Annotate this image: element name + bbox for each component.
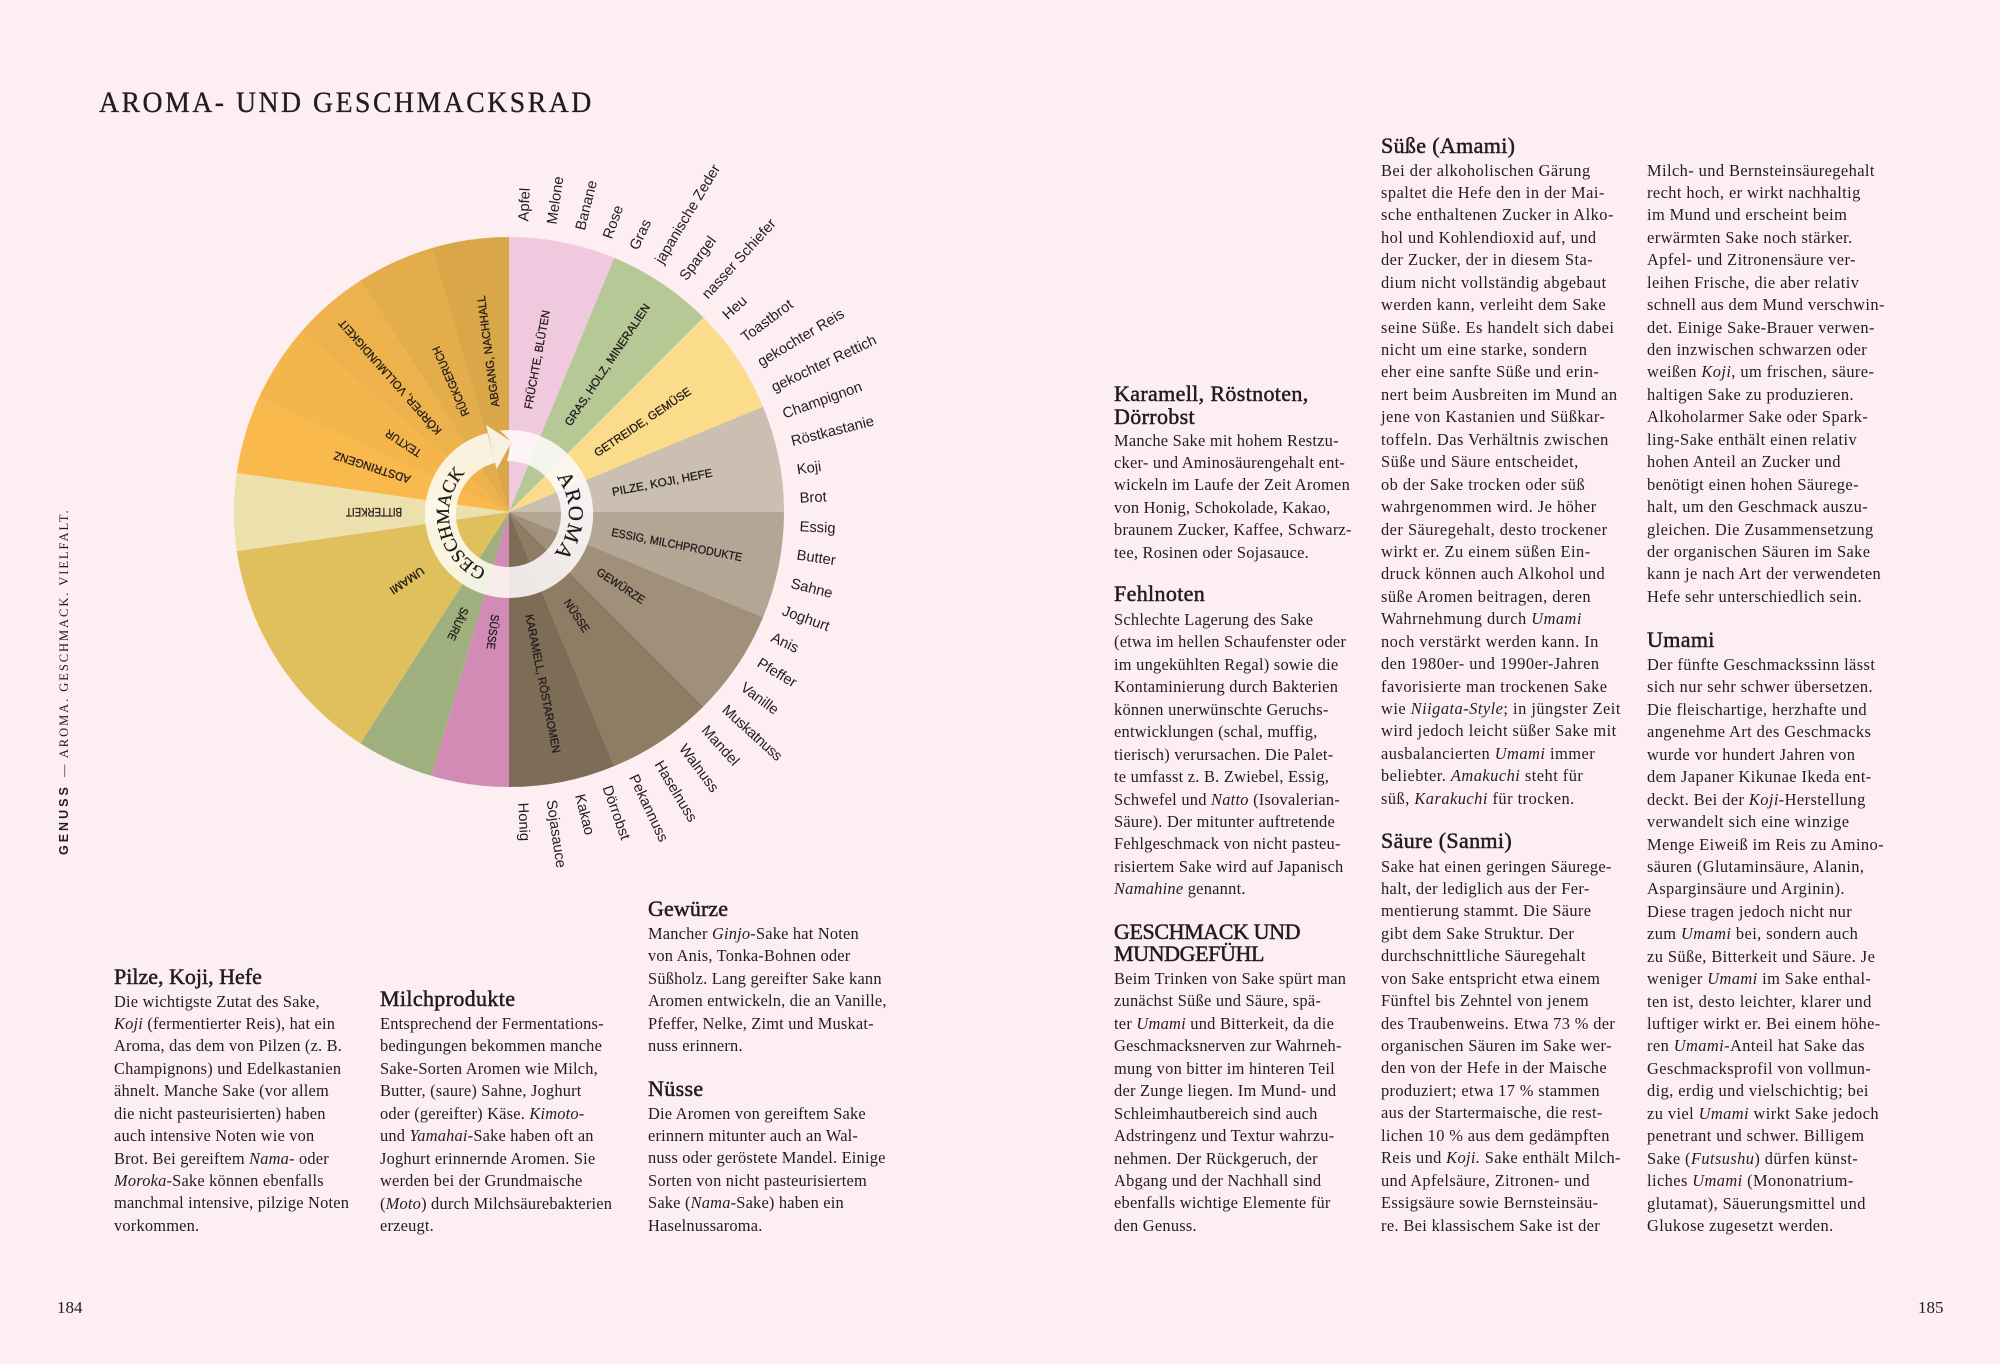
body: Sorten von nicht pasteurisiertem [648,1171,867,1190]
body: entwicklungen (schal, muffig, [1114,722,1318,741]
body: manchmal intensive, pilzige Noten [114,1193,349,1212]
outer aroma labels: nasser Schiefer [699,216,780,302]
outer aroma labels: Honig [514,802,532,841]
outer aroma labels: Sojasauce [543,799,568,869]
outer aroma labels: Champignon [781,379,864,422]
body: Sake-Sorten Aromen wie Milch, [380,1059,598,1078]
heading: Süße (Amami) [1381,133,1515,158]
body: säuren (Glutaminsäure, Alanin, [1647,857,1864,876]
text block: Säure continued: kann je nach Art der verwendeten [1647,564,1881,583]
body: der Säuregehalt, desto trockener [1381,520,1608,538]
text block: Pilze, Koji, Hefe [114,964,349,1235]
body: Sake hat einen geringen Säurege- [1381,856,1612,876]
body: nicht um eine starke, sondern [1381,340,1587,359]
body: produziert; etwa 17 % stammen [1381,1081,1600,1100]
body: verwandelt sich eine winzige [1647,812,1849,831]
body: werden bei der Grundmaische [380,1171,582,1190]
segment labels: SÄURE [444,605,470,642]
body: hol und Kohlendioxid auf, und [1381,228,1597,247]
body: wickeln im Laufe der Zeit Aromen [1114,475,1350,494]
body: den von der Hefe in der Maische [1381,1058,1607,1077]
segment labels: ADSTRINGENZ [332,448,412,485]
body: Champignons) und Edelkastanien [114,1059,341,1078]
body: Sake (Futsushu) dürfen künst- [1647,1149,1858,1168]
segment labels: FRÜCHTE, BLÜTEN [523,309,553,410]
body: nuss oder geröstete Mandel. Einige [648,1148,886,1167]
outer aroma labels: Butter [796,548,837,569]
body: sche enthaltenen Zucker in Alko- [1381,205,1614,224]
spine text: — AROMA. GESCHMACK. VIELFALT. [57,508,71,778]
page number 184: 184 [57,1298,82,1317]
body: Menge Eiweiß im Reis zu Amino- [1647,834,1884,854]
body: Aroma, das dem von Pilzen (z. B. [114,1036,342,1055]
heading: Umami [1647,627,1715,652]
body: (Moto) durch Milchsäurebakterien [380,1194,612,1212]
outer aroma labels: Brot [799,489,827,507]
text block: Säure (Sanmi) [1381,828,1621,1234]
body: wahrgenommen wird. Je höher [1381,497,1597,516]
body: Koji (fermentierter Reis), hat ein [114,1014,335,1033]
body: Entsprechend der Fermentations- [380,1014,604,1033]
outer aroma labels: Kakao [571,793,597,837]
body: Pfeffer, Nelke, Zimt und Muskat- [648,1014,874,1033]
body: weniger Umami im Sake enthal- [1647,969,1871,988]
segment labels: ABGANG, NACHHALL [476,294,502,408]
segment labels: NÜSSE [561,598,591,635]
body: Schlechte Lagerung des Sake [1114,610,1313,629]
body [380,1014,612,1235]
centre ring: taste arc with arrow: GESCHMACK [436,466,484,579]
body: deckt. Bei der Koji-Herstellung [1647,790,1866,809]
body: toffeln. Das Verhältnis zwischen [1381,430,1609,449]
text block: Säure continued: den inzwischen schwarzen oder [1647,340,1867,359]
body: auch intensive Noten wie von [114,1126,314,1145]
body: oder (gereifter) Käse. Kimoto- [380,1104,584,1123]
text block: Säure continued: recht hoch, er wirkt nachhaltig [1647,183,1861,202]
body: ter Umami und Bitterkeit, da die [1114,1014,1334,1033]
text block: Süße (Amami) [1380,133,1621,808]
outer aroma labels: Mandel [698,723,742,769]
body: Die wichtigste Zutat des Sake, [114,992,320,1010]
body: ob der Sake trocken oder süß [1381,475,1585,494]
body: den 1980er- und 1990er-Jahren [1381,654,1600,673]
body: Der fünfte Geschmackssinn lässt [1647,655,1875,674]
body: und Yamahai-Sake haben oft an [380,1126,594,1145]
heading: Milchprodukte [380,986,515,1011]
heading: Dörrobst [1114,404,1195,429]
body: halt, der lediglich aus der Fer- [1381,879,1590,898]
segment labels: RÜCKGERUCH [431,344,472,418]
body: glutamat), Säuerungsmittel und [1647,1194,1866,1212]
body: jene von Kastanien und Süßkar- [1381,407,1605,426]
body: Aromen entwickeln, die an Vanille, [648,991,887,1010]
body: dig, erdig und vielschichtig; bei [1647,1081,1869,1100]
body: Säure). Der mitunter auftretende [1114,812,1335,831]
body: penetrant und schwer. Billigem [1647,1126,1864,1145]
body: zu viel Umami wirkt Sake jedoch [1647,1104,1879,1123]
body: nehmen. Der Rückgeruch, der [1114,1148,1318,1168]
body: ten ist, desto leichter, klarer und [1647,992,1872,1011]
body: liches Umami (Mononatrium- [1647,1171,1854,1190]
heading: Pilze, Koji, Hefe [114,964,262,989]
text block: Säure continued: ling-Sake enthält einen relativ [1647,430,1857,449]
segment labels: TEXTUR [384,427,424,458]
body: lichen 10 % aus dem gedämpften [1381,1126,1610,1145]
body: sich nur sehr schwer übersetzen. [1647,677,1873,696]
body: Diese tragen jedoch nicht nur [1647,902,1852,921]
wheel wedges: aroma half [509,237,784,787]
body: dium nicht vollständig abgebaut [1381,273,1607,292]
body: erzeugt. [380,1216,434,1235]
body: Moroka-Sake können ebenfalls [114,1171,324,1190]
text block: Säure continued: der organischen Säuren im Sake [1647,542,1870,561]
text block: Geschmack und Mundgefühl [1114,919,1346,1235]
body [1114,610,1346,898]
body: des Traubenweins. Etwa 73 % der [1381,1014,1615,1033]
outer aroma labels: Rose [601,203,627,241]
body: te umfasst z. B. Zwiebel, Essig, [1114,767,1329,786]
outer aroma labels: Röstkastanie [790,414,876,450]
body: können unerwünschte Geruchs- [1114,700,1329,719]
segment labels: BITTERKEIT [346,505,402,517]
text block: Gewürze [648,896,887,1055]
body: Süßholz. Lang gereifter Sake kann [648,969,882,988]
body: Manche Sake mit hohem Restzu- [1114,430,1339,450]
body: angenehme Art des Geschmacks [1647,722,1871,741]
body: Fünftel bis Zehntel von jenem [1381,991,1589,1010]
text block: Säure continued: Milch- und Bernsteinsäuregehalt [1647,160,1875,180]
outer aroma labels: Gras [627,217,655,253]
outer aroma labels: Apfel [516,188,534,222]
body: Joghurt erinnernde Aromen. Sie [380,1149,595,1168]
body: wie Niigata-Style; in jüngster Zeit [1381,699,1621,718]
body: Wahrnehmung durch Umami [1381,609,1582,628]
text block: Säure continued: Hefe sehr unterschiedlich sein. [1647,587,1862,606]
segment labels: GRAS, HOLZ, MINERALIEN [563,302,653,429]
body: Fehlgeschmack von nicht pasteu- [1114,834,1341,853]
outer aroma labels: Melone [545,175,567,225]
outer aroma labels: Toastbrot [738,297,796,346]
body: eher eine sanfte Süße und erin- [1381,362,1599,381]
text block: Säure continued: haltigen Sake zu produzieren. [1647,385,1854,404]
text block: Säure continued: halt, um den Geschmack auszu- [1647,497,1868,516]
body: Schwefel und Natto (Isovalerian- [1114,790,1340,808]
segment labels: GETREIDE, GEMÜSE [592,386,694,460]
body: zunächst Süße und Säure, spä- [1114,991,1321,1010]
body: ebenfalls wichtige Elemente für [1114,1193,1331,1212]
body: Kontaminierung durch Bakterien [1114,677,1338,696]
segment labels [332,294,743,754]
centre ring: aroma arc: AROMA [554,475,583,556]
body: seine Süße. Es handelt sich dabei [1381,318,1614,337]
outer aroma labels: Walnuss [675,741,721,796]
body: ausbalancierten Umami immer [1381,744,1595,763]
body: beliebter. Amakuchi steht für [1381,766,1583,785]
body: Mancher Ginjo-Sake hat Noten [648,924,859,943]
heading: Fehlnoten [1114,581,1205,606]
body: dem Japaner Kikunae Ikeda ent- [1647,767,1872,786]
heading: Gewürze [648,896,728,921]
body: von Honig, Schokolade, Kakao, [1114,498,1331,517]
centre ring: aroma arc [500,430,594,598]
outer aroma labels [514,162,879,869]
body: Brot. Bei gereiftem Nama- oder [114,1149,329,1168]
outer aroma labels: gekochter Rettich [769,332,879,396]
heading: Säure (Sanmi) [1381,828,1512,853]
text block: Säure continued: im Mund und erscheint beim [1647,205,1847,224]
body [1114,430,1352,562]
outer aroma labels: Heu [720,293,751,323]
text block: Säure continued: weißen Koji, um frischen, säure- [1647,362,1874,381]
outer aroma labels: Vanille [737,680,781,718]
text block: Säure continued: erwärmten Sake noch stärker. [1647,228,1853,247]
body: durchschnittliche Säuregehalt [1381,946,1586,965]
body: spaltet die Hefe den in der Mai- [1381,183,1605,202]
body: Süße und Säure entscheidet, [1381,452,1579,471]
text block: Säure continued: hohen Anteil an Zucker und [1647,452,1841,471]
text block: Nüsse [648,1076,886,1235]
body: druck können auch Alkohol und [1381,564,1605,583]
body: wirkt er. Zu einem süßen Ein- [1381,542,1591,561]
body: mentierung stammt. Die Säure [1381,901,1591,920]
body: Bei der alkoholischen Gärung [1381,160,1591,180]
body: luftiger wirkt er. Bei einem höhe- [1647,1014,1881,1033]
text block: Säure continued: gleichen. Die Zusammensetzung [1647,520,1874,538]
body: Die Aromen von gereiftem Sake [648,1104,866,1122]
body: zu Süße, Bitterkeit und Säure. Je [1647,947,1875,966]
body: wird jedoch leicht süßer Sake mit [1381,721,1617,740]
body: Adstringenz und Textur wahrzu- [1114,1126,1334,1145]
body [1380,160,1621,808]
body: Asparginsäure und Arginin). [1647,879,1845,898]
text block: Säure continued: schnell aus dem Mund verschwin- [1647,295,1885,314]
body: Geschmacksnerven zur Wahrneh- [1114,1036,1342,1055]
body: Sake (Nama-Sake) haben ein [648,1193,844,1212]
body: favorisierte man trockenen Sake [1381,677,1608,696]
outer aroma labels: japanische Zeder [652,162,724,268]
body: süße Aromen beitragen, deren [1381,587,1591,606]
body: Essigsäure sowie Bernsteinsäu- [1381,1193,1598,1212]
body: noch verstärkt werden kann. In [1381,632,1599,651]
segment labels: PILZE, KOJI, HEFE [611,468,714,499]
text block: Säure continued: benötigt einen hohen Säurege- [1647,475,1859,494]
body: vorkommen. [114,1216,199,1235]
text block: Karamell, Röstnoten, Dörrobst [1114,381,1352,562]
body: nert beim Ausbreiten im Mund an [1381,385,1618,404]
body: (etwa im hellen Schaufenster oder [1114,632,1346,651]
body [1381,856,1621,1234]
outer aroma labels: Pekannuss [625,772,671,845]
body: und Apfelsäure, Zitronen- und [1381,1171,1590,1190]
outer aroma labels: Muskatnuss [719,702,785,764]
body: Butter, (saure) Sahne, Joghurt [380,1081,582,1100]
segment labels: ESSIG, MILCHPRODUKTE [610,527,743,564]
body: Haselnussaroma. [648,1216,763,1235]
body: von Sake entspricht etwa einem [1381,969,1600,988]
body: von Anis, Tonka-Bohnen oder [648,946,850,965]
text block: Säure continued [1647,160,1885,606]
body: Abgang und der Nachhall sind [1114,1171,1321,1190]
body: organischen Säuren im Sake wer- [1381,1036,1612,1055]
outer aroma labels: Spargel [677,234,720,284]
outer aroma labels: Essig [799,519,836,537]
body: cker- und Aminosäurengehalt ent- [1114,453,1345,472]
heading [1114,381,1309,429]
wheel wedges: taste half [234,237,509,787]
body: der Zucker, der in diesem Sta- [1381,250,1593,269]
outer aroma labels: Haselnuss [651,758,700,825]
body [1114,969,1346,1235]
heading: Karamell, Röstnoten, [1114,381,1309,406]
body [1647,655,1884,1235]
body: nuss erinnern. [648,1036,743,1055]
body: süß, Karakuchi für trocken. [1381,789,1575,808]
outer aroma labels: Sahne [789,576,834,602]
segment labels: KÖRPER, VOLLMUNDIGKEIT [337,316,444,436]
body: bedingungen bekommen manche [380,1036,602,1055]
text block: Umami [1647,627,1884,1235]
body: Schleimhautbereich sind auch [1114,1104,1318,1123]
body: tee, Rosinen oder Sojasauce. [1114,543,1309,562]
body: Beim Trinken von Sake spürt man [1114,969,1346,988]
segment labels: GEWÜRZE [594,566,647,607]
text block: Fehlnoten [1114,581,1346,898]
text block: Säure continued: Apfel- und Zitronensäure ver- [1647,250,1856,269]
body: gibt dem Sake Struktur. Der [1381,924,1574,943]
body: Geschmacksprofil von vollmun- [1647,1059,1871,1078]
outer aroma labels: Banane [573,179,601,232]
heading: Nüsse [648,1076,704,1101]
body: zum Umami bei, sondern auch [1647,924,1858,943]
body: ren Umami-Anteil hat Sake das [1647,1036,1865,1055]
body: Die fleischartige, herzhafte und [1647,700,1867,719]
body: erinnern mitunter auch an Wal- [648,1126,858,1145]
text block: Milchprodukte [380,986,612,1235]
body: tierisch) verursachen. Die Palet- [1114,745,1333,764]
body: aus der Startermaische, die rest- [1381,1103,1603,1122]
body: mung von bitter im hinteren Teil [1114,1059,1335,1078]
spine text: GENUSS [57,784,71,855]
body: risiertem Sake wird auf Japanisch [1114,857,1343,876]
body: Glukose zugesetzt werden. [1647,1216,1834,1235]
body [648,1104,886,1235]
body: wurde vor hundert Jahren von [1647,745,1855,764]
body: den Genuss. [1114,1216,1197,1235]
segment labels: UMAMI [387,564,426,596]
outer aroma labels: Koji [796,459,822,478]
heading [1114,919,1300,966]
outer aroma labels: Dörrobst [599,784,633,842]
body: braunem Zucker, Kaffee, Schwarz- [1114,520,1352,539]
body: ähnelt. Manche Sake (vor allem [114,1081,329,1100]
outer aroma labels: Anis [768,630,801,657]
title: AROMA- UND GESCHMACKSRAD [99,86,594,119]
segment labels: SÜSSE [484,614,500,650]
outer aroma labels: gekochter Reis [755,306,847,370]
body: re. Bei klassischem Sake ist der [1381,1216,1600,1234]
text block: Säure continued: leihen Frische, die aber relativ [1647,273,1859,292]
page number 185: 185 [1918,1298,1944,1317]
body [114,992,349,1235]
body: die nicht pasteurisierten) haben [114,1104,326,1123]
text block: Säure continued: det. Einige Sake-Brauer verwen- [1647,318,1875,337]
body: der Zunge liegen. Im Mund- und [1114,1081,1336,1100]
segment labels: KARAMELL, RÖSTAROMEN [522,614,562,754]
body: Namahine genannt. [1114,879,1246,898]
outer aroma labels: Joghurt [780,604,831,635]
heading: GESCHMACK UND [1114,919,1300,944]
body: im ungekühlten Regal) sowie die [1114,655,1338,674]
body [648,924,887,1055]
body: Reis und Koji. Sake enthält Milch- [1381,1148,1621,1167]
outer aroma labels: Pfeffer [754,655,799,691]
heading: MUNDGEFÜHL [1114,941,1264,966]
text block: Säure continued: Alkoholarmer Sake oder Spark- [1647,407,1868,426]
body: werden kann, verleiht dem Sake [1381,295,1606,314]
centre ring: taste arc with arrow [424,425,512,598]
